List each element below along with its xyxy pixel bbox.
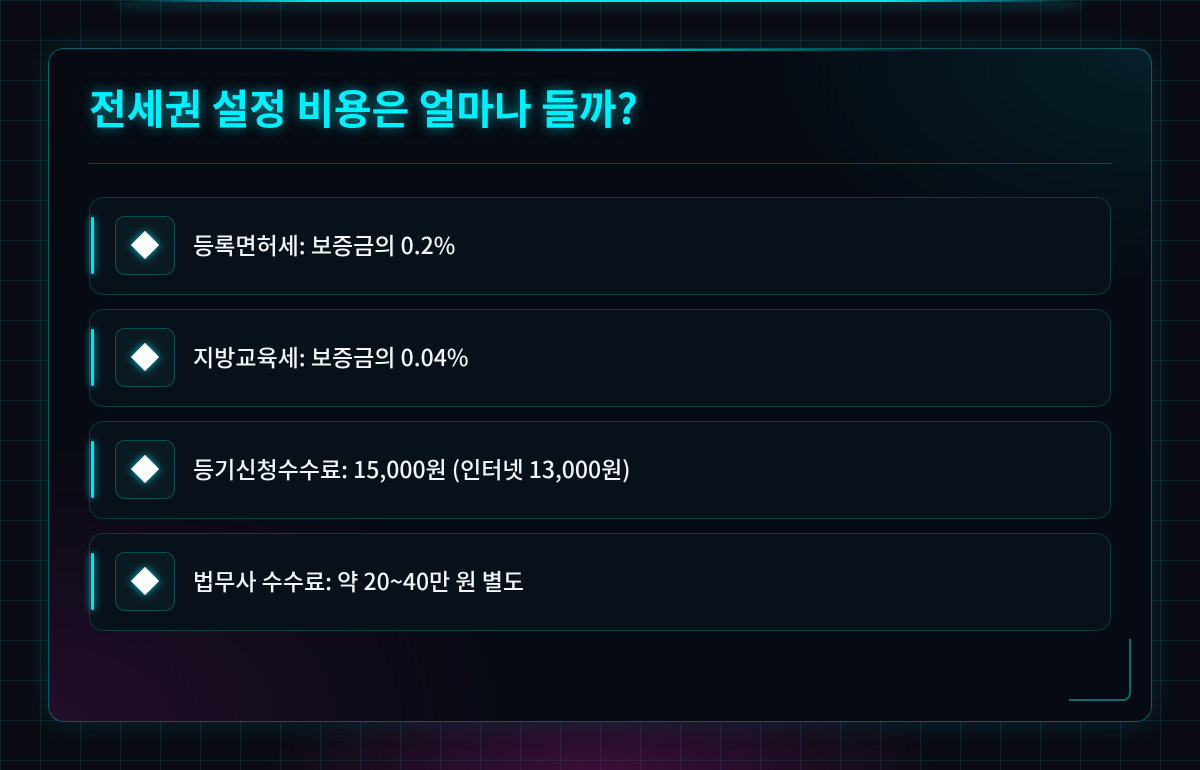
item: registration fee: 등기신청수수료: 15,000원 (인터넷 13,000원): [193, 451, 630, 485]
title: 전세권 설정 비용은 얼마나 들까?: [89, 76, 638, 136]
item: legal fee: 법무사 수수료: 약 20~40만 원 별도: [193, 563, 524, 597]
corner decoration: [1069, 639, 1131, 701]
item: local education tax: 지방교육세: 보증금의 0.04%: [193, 339, 468, 373]
item: legal fee: [89, 533, 1111, 631]
item: registration fee: [89, 421, 1111, 519]
item: registration tax: [89, 197, 1111, 295]
item: registration tax: 등록면허세: 보증금의 0.2%: [193, 227, 455, 261]
item: local education tax: [89, 309, 1111, 407]
